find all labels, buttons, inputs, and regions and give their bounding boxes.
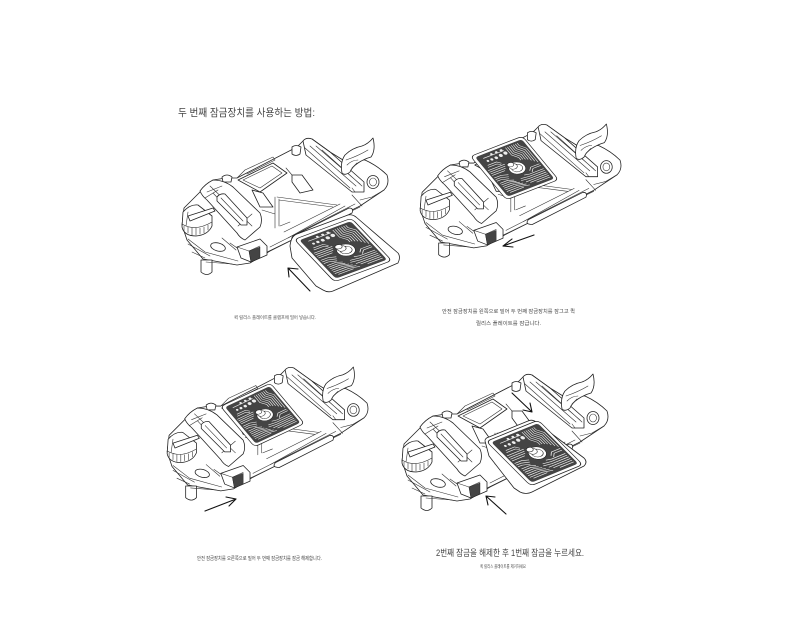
- caption 4 note: 퀵 릴리스 플레이트를 제거하세요: [480, 563, 526, 570]
- caption 2: 안전 잠금장치를 왼쪽으로 밀어 두 번째 잠금장치를 잠그고 퀵: [442, 308, 575, 315]
- caption 2: 릴리스 플레이트를 잠급니다.: [476, 320, 541, 327]
- arrow 4a: [512, 393, 532, 412]
- clamp device 3: [167, 367, 368, 500]
- arrow 1: [288, 268, 310, 291]
- caption 3: 안전 잠금장치를 오른쪽으로 밀어 두 번째 잠금장치를 잠금 해제합니다.: [197, 555, 322, 562]
- plate body 4: [485, 420, 586, 494]
- plate body 1: [290, 215, 400, 292]
- panel 3: unlock: [167, 367, 368, 562]
- quick release plate 1: [294, 218, 392, 282]
- caption 2: [442, 308, 575, 327]
- clamp device 4: [402, 374, 608, 510]
- caption 1: 퀵 릴리스 플레이트를 클램프에 밀어 넣습니다.: [234, 314, 316, 321]
- caption 4 heading: 2번째 잠금을 해제한 후 1번째 잠금을 누르세요.: [436, 548, 584, 558]
- panel 1: insert plate: [182, 138, 400, 321]
- arrow 2: [503, 235, 534, 247]
- clamp device 2: [420, 124, 621, 257]
- quick release plate 3: [221, 383, 304, 447]
- clamp device 1: [182, 138, 388, 274]
- panel 4: remove plate: [402, 374, 608, 570]
- panel 2: lock: [420, 124, 621, 327]
- arrow 4b: [486, 496, 506, 514]
- title: 두 번째 잠금장치를 사용하는 방법:: [178, 106, 315, 119]
- quick release plate 2: [471, 136, 558, 200]
- quick release plate 4: [486, 420, 583, 486]
- arrow 3: [205, 497, 236, 511]
